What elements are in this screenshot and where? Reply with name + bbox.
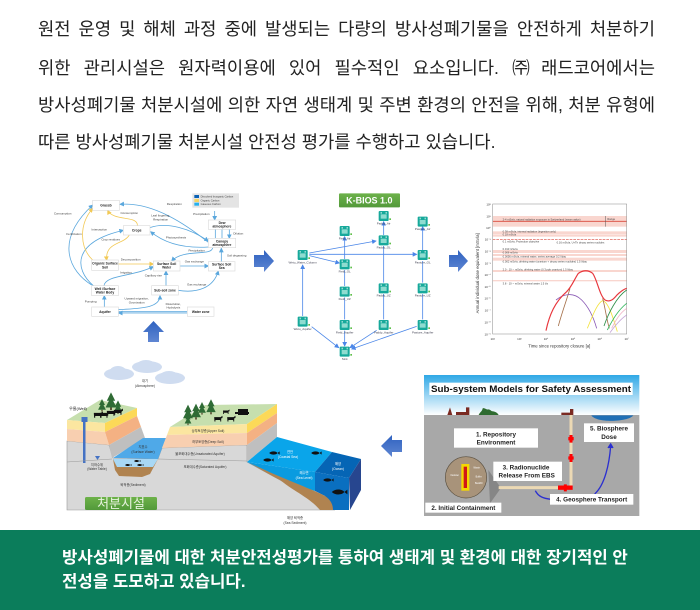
- flow labels: Water zone: [192, 310, 210, 314]
- axis labels: 10⁻⁶: [485, 297, 491, 301]
- flow labels: Water Body: [96, 291, 114, 295]
- axis labels: 10⁻⁷: [485, 309, 491, 313]
- landscape labels: 우물(Well): [69, 405, 88, 411]
- axis labels: 10⁷: [624, 337, 629, 341]
- flow labels: Surface Soil: [157, 262, 176, 266]
- panel: sub-system models: [424, 375, 639, 516]
- clouds: [104, 360, 185, 384]
- landscape labels: 포화대수층(Saturated Aquifer): [184, 464, 226, 469]
- arrow: right to K-BIOS: [254, 250, 274, 272]
- K-BIOS label: [339, 193, 400, 207]
- arrow: up to carbon flow: [143, 321, 164, 342]
- landscape labels: (Surface Water): [131, 450, 155, 454]
- label: geosphere transport: [550, 494, 633, 505]
- label: radionuclide release: 3. Radionuclide: [503, 464, 550, 471]
- panel: carbon flow diagram: Crop residues: [101, 237, 120, 241]
- landscape labels: 지하수위: [91, 462, 103, 467]
- panel: carbon flow diagram: Interception: [92, 227, 107, 231]
- panel: carbon flow diagram: Ozonization: [129, 300, 145, 304]
- axis labels: Annual individual dose equivalent [mSv/a]: [475, 233, 480, 313]
- right soil block: [162, 404, 277, 462]
- landscape labels: 지표수: [138, 444, 148, 449]
- flow labels: Grassb: [100, 204, 112, 208]
- band labels: 0.38 mSv/a, internal radiation (ingestion only): [503, 229, 556, 233]
- band labels: [503, 217, 616, 286]
- node labels: [288, 221, 433, 361]
- ground base: [67, 441, 335, 510]
- landscape labels: 상부토양층(Upper Soil): [192, 428, 224, 433]
- disposal facility label: [85, 496, 157, 511]
- panel: carbon flow diagram: Gas exchange: [185, 260, 204, 264]
- flow labels: atmosphere: [213, 225, 232, 229]
- label: biosphere dose: Dose: [601, 434, 617, 441]
- node labels: Field_UZ: [339, 297, 351, 301]
- band labels: 2-4 mSv/a, natural radiation exposure in Switzerland (mean value): [503, 218, 581, 222]
- node labels: Paddy_UZ: [377, 294, 391, 298]
- node labels: Field_GL: [339, 270, 351, 274]
- axis labels: 10⁴: [544, 337, 549, 341]
- node labels: Field_Aquifer: [336, 330, 353, 334]
- containment cross-section: Canister: [450, 474, 459, 477]
- axis labels: 10⁻⁵: [485, 285, 491, 289]
- axis labels: 10²: [491, 337, 495, 341]
- legend: Gaseous Carbon: [201, 202, 221, 206]
- conclusion band: [0, 530, 700, 610]
- panel: carbon flow diagram: Capillary rise: [145, 273, 162, 277]
- label: initial containment: 2. Initial Containment: [431, 505, 496, 512]
- flow boxes: [92, 200, 236, 316]
- pipe and release points: [488, 415, 574, 503]
- panel: carbon flow diagram: Respiration: [167, 202, 182, 206]
- flow labels: Well /Surface: [95, 287, 116, 291]
- label: initial containment: [425, 503, 501, 513]
- band labels: 0.18 mSv/a: [503, 233, 517, 237]
- band labels: 0.006 mSv/a: [503, 251, 518, 255]
- conclusion text: 전성을 도모하고 있습니다.: [62, 572, 245, 590]
- flow labels: Crops: [132, 228, 142, 232]
- flow labels: Water: [162, 266, 172, 270]
- band labels: 0.1 mSv/a, Protection objective: [503, 240, 540, 244]
- landscape labels: 해수면: [299, 470, 309, 475]
- panel: carbon flow diagram: Decomposition: [121, 258, 141, 262]
- axis labels: 10⁵: [571, 337, 576, 341]
- containment cross-section: [445, 457, 487, 498]
- coastal sea and ocean: [247, 437, 361, 510]
- panel: carbon flow diagram: Precipitation: [193, 212, 210, 216]
- legend: Organic Carbon: [201, 198, 220, 202]
- landscape labels: 퇴적층(Sediment): [120, 482, 146, 487]
- node labels: Paddy_Aquifer: [374, 330, 393, 334]
- node labels: Sink: [342, 357, 348, 361]
- node labels: Paddy_GL: [377, 246, 391, 250]
- flow labels: Surface Soil: [212, 262, 231, 266]
- panel: carbon flow diagram: Dissolution,: [166, 302, 181, 306]
- band labels: Range: [607, 217, 616, 221]
- panel: carbon flow diagram: Precipitation: [188, 248, 205, 252]
- flow arrows: [69, 204, 229, 313]
- landscape labels: (Atmosphere): [135, 384, 155, 388]
- landscape labels: 하부토양층(Deep Soil): [192, 439, 224, 444]
- panel: carbon flow diagram: Hydrolysis: [166, 306, 181, 310]
- panel: carbon flow diagram: Photosynthesis: [166, 235, 187, 239]
- axis labels: 10⁶: [597, 337, 603, 341]
- surface water and sediment: [113, 438, 166, 477]
- panel: carbon flow diagram: Respiration: [153, 217, 169, 221]
- flow labels: Sea: [219, 266, 225, 270]
- legend: [192, 193, 239, 208]
- intro paragraph: [38, 19, 655, 152]
- landscape labels: (Water Table): [87, 467, 107, 471]
- panel: carbon flow diagram: Upward migration,: [125, 297, 149, 301]
- panel: carbon flow diagram: Dilution: [233, 231, 244, 235]
- landscape labels: 해양: [335, 461, 341, 466]
- landscape labels: (Coastal Sea): [278, 455, 298, 459]
- band labels: 2.0 · 10⁻⁴ mSv/a, drinking water (0.3 ppb uranium) 1.5 l/day: [503, 267, 574, 271]
- flow labels: atmosphere: [213, 243, 232, 247]
- left soil block: [67, 400, 145, 458]
- plot frame: [493, 204, 627, 334]
- axis labels: 10⁻⁹: [484, 332, 491, 336]
- transport arrows: [535, 444, 613, 499]
- conclusion text: 방사성폐기물에 대한 처분안전성평가를 통하여 생태계 및 환경에 대한 장기적인 안: [62, 548, 628, 567]
- disposal facility label: 처분시설: [97, 496, 145, 511]
- flow labels: Aquifer: [99, 310, 112, 314]
- band labels: 0.0056 mSv/a, mineral water, series average 0.2 l/day: [503, 254, 567, 258]
- band labels: 0.16 mSv/a, U+Th decay series nuclides: [557, 241, 605, 245]
- panel: carbon flow diagram: Leaf fingering,: [151, 213, 170, 217]
- flow labels: Sub-soil zone: [154, 288, 176, 292]
- panel: carbon flow diagram: [54, 193, 247, 316]
- panel: carbon flow diagram: Consumption: [54, 211, 72, 215]
- containment cross-section: Buffer: [476, 475, 482, 478]
- intro paragraph: 따른 방사성폐기물 처분시설 안전성 평가를 수행하고 있습니다.: [38, 132, 496, 152]
- label: biosphere dose: 5. Biosphere: [590, 426, 628, 433]
- label: repository environment: 1. Repository: [476, 431, 517, 438]
- axis labels: [475, 202, 629, 348]
- intro paragraph: 방사성폐기물 처분시설에 의한 자연 생태계 및 주변 환경의 안전을 위해, 처분 유형에: [38, 95, 655, 115]
- K-BIOS label: K-BIOS 1.0: [346, 196, 393, 206]
- axis labels: 10²: [486, 202, 491, 206]
- containment cross-section: Backfill: [475, 483, 483, 485]
- node labels: Wetu_Aquifer: [294, 327, 312, 331]
- panel: carbon flow diagram: Pumping: [85, 299, 97, 303]
- landscape labels: (Sea Level): [296, 476, 312, 480]
- panel: carbon flow diagram: Gas exchange: [187, 283, 207, 287]
- flow labels: Dew: [219, 221, 226, 225]
- label: radionuclide release: Release From EBS: [499, 473, 555, 480]
- trees and animals: [94, 392, 249, 425]
- axis labels: 10³: [517, 337, 521, 341]
- panel: carbon flow diagram: Soil degassing: [227, 253, 247, 257]
- node labels: Paddy_Air: [377, 221, 391, 225]
- panel: dose chart: [475, 202, 629, 348]
- label: geosphere transport: 4. Geosphere Transport: [556, 497, 628, 504]
- node labels: Pasture_Aquifer: [412, 330, 433, 334]
- axis labels: 10⁻⁸: [485, 320, 491, 324]
- flow labels: Soil: [102, 265, 108, 269]
- panel: carbon flow diagram: Fertilization: [66, 232, 82, 236]
- band labels: 0.013 mSv/a: [503, 247, 518, 251]
- axis labels: 10¹: [486, 214, 491, 218]
- panel: subsurface landscape: [67, 360, 361, 525]
- band labels: 0.002 mSv/a, drinking water (uranium + decay series nuclides) 1.5 l/day: [503, 260, 588, 264]
- well and water table: [67, 417, 247, 463]
- conclusion text: [62, 548, 628, 590]
- label: biosphere dose: [584, 423, 634, 442]
- panel: carbon flow diagram: Irrigation: [120, 270, 132, 274]
- flow labels: Canopy: [216, 239, 228, 243]
- node labels: Pasture_UZ: [415, 294, 431, 298]
- label: repository environment: Environment: [477, 440, 516, 447]
- surface buildings and trees: [447, 407, 633, 421]
- landscape labels: 연안: [287, 449, 293, 454]
- axis labels: 10⁻⁴: [484, 273, 491, 277]
- axis labels: 10⁰: [486, 226, 491, 230]
- node labels: Wetu_Water_Column: [288, 260, 317, 264]
- landscape labels: 해양 퇴적층: [287, 515, 303, 520]
- sky: [424, 375, 639, 415]
- panel: K-BIOS 1.0 network: [288, 193, 433, 361]
- containment cross-section: Waste: [473, 467, 481, 470]
- ground: [424, 415, 639, 516]
- band labels: 3.8 · 10⁻⁵ mSv/a, mineral water 1.5 l/a: [503, 282, 548, 286]
- landscape labels: (Ocean): [332, 467, 344, 471]
- intro paragraph: 위한 관리시설은 원자력이용에 있어 필수적인 요소입니다. ㈜ 래드코어에서는: [38, 58, 655, 78]
- axis labels: 10⁻²: [485, 250, 491, 254]
- legend: Dissolved Inorganic Carbon: [201, 194, 234, 198]
- axis labels: Time since repository closure [a]: [528, 343, 590, 348]
- network nodes: [298, 211, 430, 357]
- landscape labels: (Sea Sediment): [284, 521, 306, 525]
- dose curves: [546, 271, 627, 333]
- reference dose bands: [493, 216, 627, 281]
- title: Sub-system Models for Safety Assessment: [431, 384, 631, 394]
- label: repository environment: [454, 428, 538, 448]
- arrow: left to landscape: [381, 435, 402, 457]
- label: radionuclide release: [493, 462, 562, 481]
- flow labels: [92, 204, 232, 314]
- panel: carbon flow diagram: Consumption: [121, 211, 138, 215]
- landscape labels: 대기: [142, 378, 148, 383]
- landscape labels: 불포화대수층(Unsaturated Aquifer): [175, 451, 225, 456]
- axis labels: 10⁻³: [485, 261, 491, 265]
- arrow: right to dose chart: [449, 250, 468, 272]
- network links: [303, 222, 423, 349]
- landscape labels: [69, 378, 344, 525]
- axis labels: 10⁻¹: [485, 238, 491, 242]
- intro paragraph: 원전 운영 및 해체 과정 중에 발생되는 다량의 방사성폐기물을 안전하게 처분하기: [38, 19, 655, 39]
- flow labels: Organic Surface: [92, 261, 118, 265]
- node labels: Pasture_Air: [415, 227, 430, 231]
- node labels: Field_Air: [339, 236, 351, 240]
- node labels: Pasture_GL: [415, 260, 431, 264]
